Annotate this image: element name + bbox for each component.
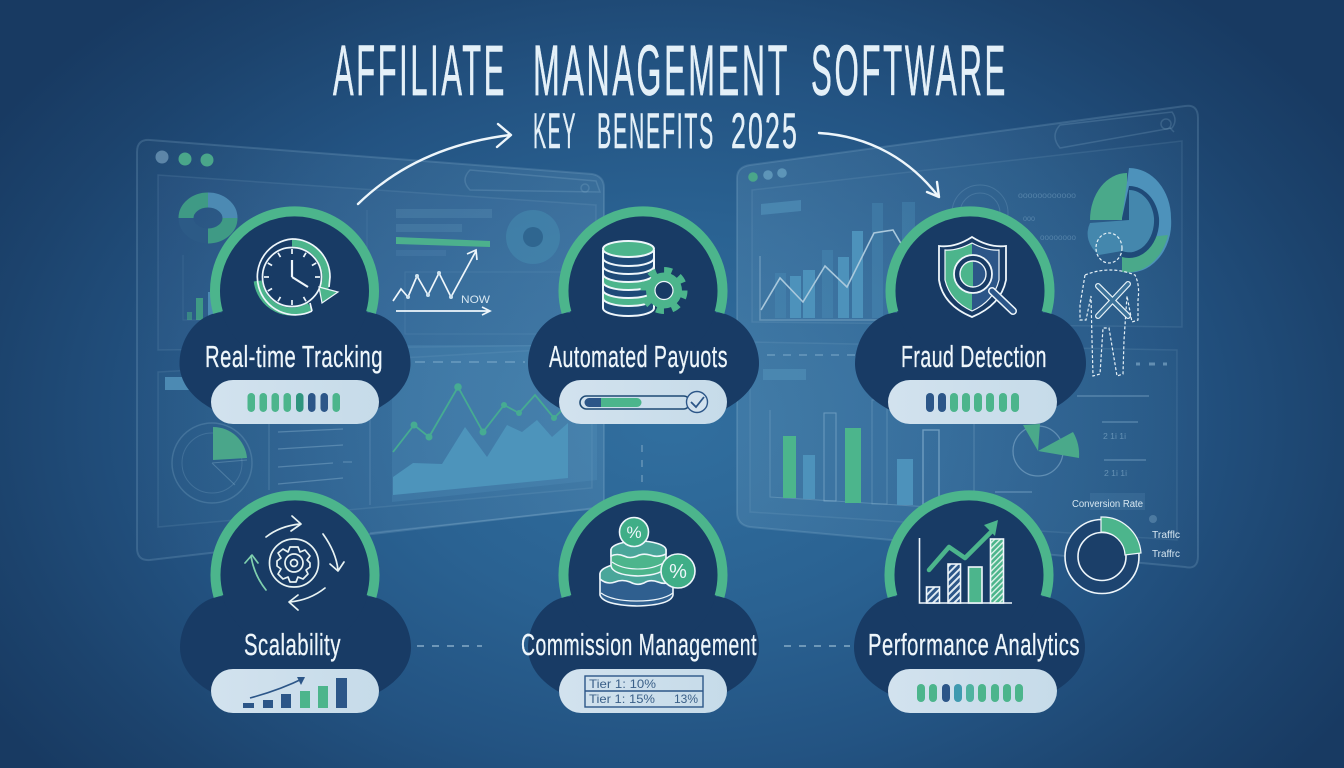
pill: segment meter bbox=[211, 380, 379, 424]
icon: tiered cake with percent badges: % bbox=[669, 561, 687, 583]
cross mark bbox=[1098, 284, 1128, 316]
title: MANAGEMENT bbox=[533, 32, 790, 111]
icon: coin stack and gear bbox=[603, 241, 684, 316]
icon: tiered cake with percent badges: % bbox=[626, 523, 642, 542]
chart frame bbox=[183, 210, 575, 345]
panel: scalability bbox=[180, 495, 411, 713]
icon: tiered cake with percent badges bbox=[600, 518, 695, 606]
label: conversion rate: Conversion Rate bbox=[1072, 499, 1143, 510]
subtitle bbox=[533, 103, 799, 159]
list bars bbox=[396, 209, 492, 256]
pill: tier table: Tier 1: 10% bbox=[589, 677, 656, 691]
line pie bbox=[172, 423, 252, 503]
window dots bbox=[748, 168, 787, 182]
icon: clock bbox=[257, 239, 338, 315]
lower pie bbox=[1013, 424, 1079, 476]
faint stat rows: 2 1i 1i bbox=[1103, 432, 1126, 441]
subtitle: KEY bbox=[533, 103, 577, 159]
pill: mini growth bars bbox=[211, 669, 379, 713]
faint stat rows bbox=[995, 396, 1149, 492]
large pie bbox=[1088, 168, 1171, 273]
list lines bbox=[278, 429, 352, 484]
pill: segment meter bbox=[888, 669, 1057, 713]
label: Performance Analytics bbox=[868, 627, 1080, 662]
faint concentric mark bbox=[952, 185, 1008, 241]
panel: automated payouts bbox=[528, 211, 759, 424]
faint stat rows: 2 1i 1i bbox=[1104, 469, 1127, 478]
top bar chart bbox=[775, 202, 915, 318]
search bar bbox=[1055, 112, 1175, 148]
pill: tier table: 13% bbox=[674, 692, 698, 706]
panel edge lines bbox=[269, 420, 610, 533]
panel: real-time tracking bbox=[180, 211, 410, 424]
label: Fraud Detection bbox=[901, 339, 1047, 374]
blue tags bbox=[761, 200, 806, 380]
faint text: ooo bbox=[1023, 214, 1035, 223]
icon: shield with magnifier bbox=[939, 237, 1013, 317]
icon: gear with cycle arrows bbox=[245, 516, 344, 610]
pill: progress bar bbox=[559, 380, 727, 424]
dashes bbox=[1136, 362, 1167, 523]
dashed figure bbox=[1080, 233, 1139, 376]
connector dashes bbox=[417, 445, 850, 646]
panel: performance analytics bbox=[854, 495, 1085, 713]
label: traffic: Trafflc bbox=[1152, 530, 1180, 541]
arrow: left to subtitle bbox=[358, 124, 511, 204]
faint text: oooooooo bbox=[1040, 233, 1077, 242]
icon: bar chart with rising arrow bbox=[920, 520, 1012, 603]
conversion rate donut bbox=[1065, 499, 1180, 594]
pie bbox=[506, 210, 560, 264]
white sparkline bbox=[393, 250, 490, 315]
panel: right dashboard window bbox=[737, 106, 1198, 568]
pill: tier table bbox=[559, 669, 727, 713]
subtitle: BENEFITS bbox=[597, 103, 715, 159]
area chart bbox=[392, 345, 597, 502]
title bbox=[333, 32, 1008, 111]
arrow: subtitle to fraud detection bbox=[819, 133, 939, 197]
top line chart bbox=[760, 230, 903, 320]
pill: tier table: Tier 1: 15% bbox=[589, 692, 655, 706]
window dots bbox=[156, 150, 214, 166]
lower bar chart bbox=[770, 400, 974, 507]
panel: fraud detection bbox=[855, 211, 1086, 424]
label tab bbox=[1090, 493, 1145, 510]
search bar bbox=[465, 170, 600, 192]
label: Automated Payuots bbox=[549, 339, 728, 374]
label: Scalability bbox=[244, 627, 341, 662]
title: AFFILIATE bbox=[333, 32, 507, 111]
label: traffic second: Traffrc bbox=[1152, 549, 1180, 560]
donut chart bbox=[186, 200, 230, 236]
lower panel outline bbox=[158, 347, 592, 527]
pill: segment meter bbox=[888, 380, 1057, 424]
inner panel outline bbox=[158, 175, 596, 350]
faint text: oooooooooooo bbox=[1018, 191, 1077, 200]
mini bars bbox=[187, 292, 214, 320]
subtitle: 2025 bbox=[731, 103, 799, 159]
text: SOFTWARE bbox=[811, 32, 1008, 111]
label: Commission Management bbox=[521, 627, 757, 662]
label: now: NOW bbox=[461, 294, 491, 306]
panel: left dashboard window bbox=[137, 140, 610, 560]
dashed separator bbox=[767, 354, 857, 356]
panel: commission management bbox=[521, 495, 759, 713]
small blue tag bbox=[165, 377, 191, 390]
label: Real-time Tracking bbox=[205, 339, 383, 374]
inner panels bbox=[750, 141, 1182, 540]
faint text bbox=[1018, 191, 1077, 242]
